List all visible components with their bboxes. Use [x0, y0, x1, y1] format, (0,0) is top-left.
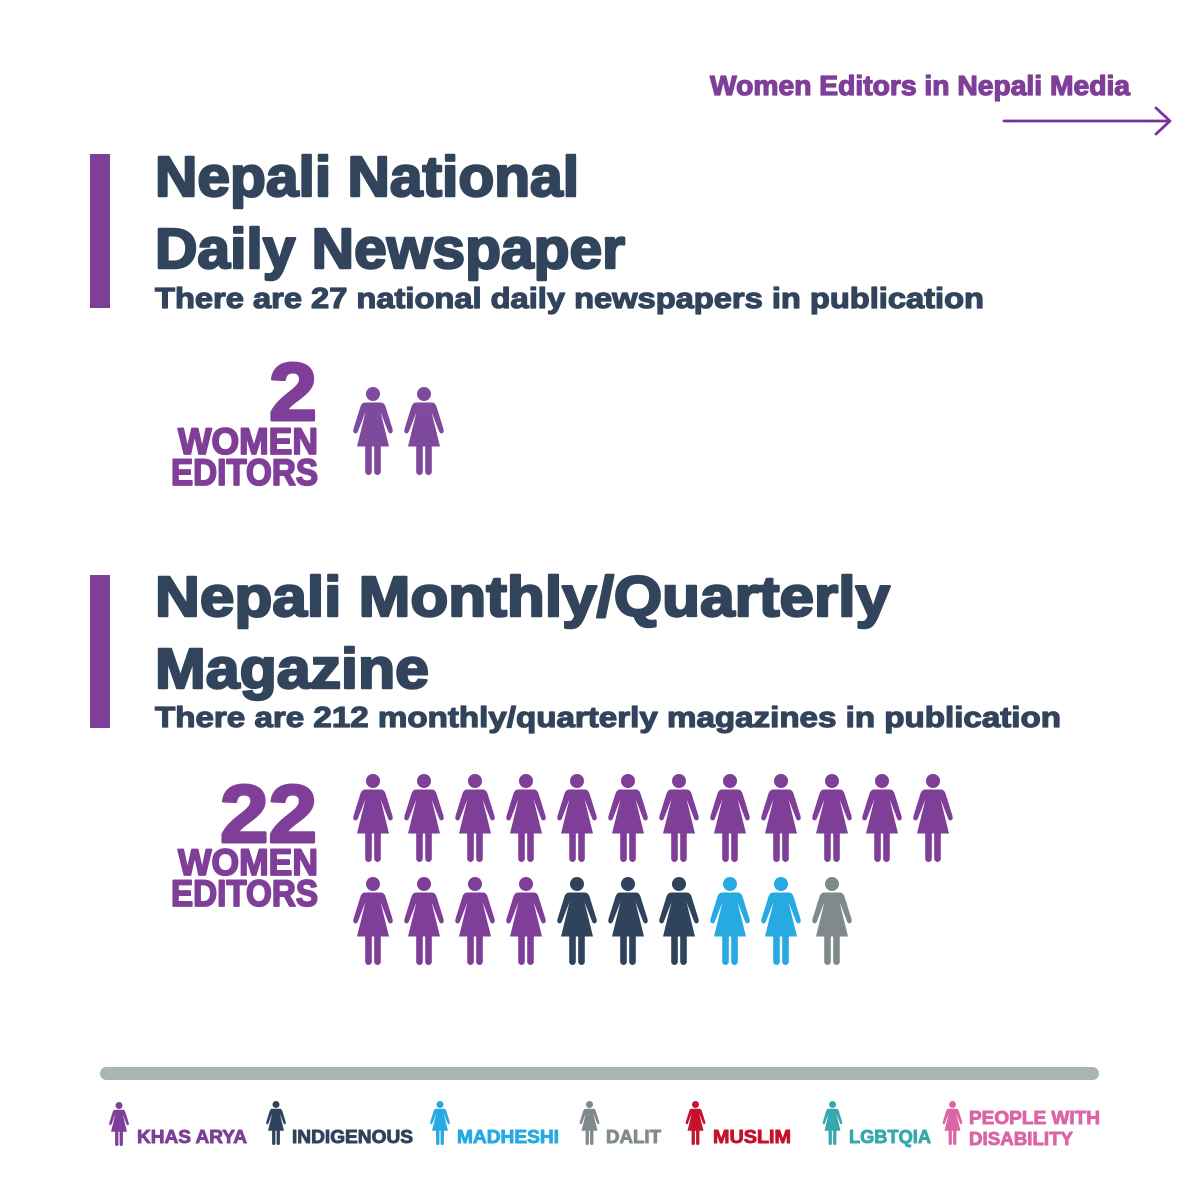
statistic: 2 women editors: EDITORS	[171, 452, 318, 493]
heading: Nepali Monthly/Quarterly	[155, 565, 890, 629]
heading	[155, 565, 890, 701]
pictogram: 22 women by group	[353, 774, 953, 965]
statistic: 2 women editors: WOMEN	[178, 421, 318, 462]
subheading: There are 27 national daily newspapers in publication	[155, 283, 984, 315]
accent bar	[90, 154, 110, 308]
legend item: Muslim	[686, 1101, 791, 1147]
legend item: LGBTQIA: LGBTQIA	[849, 1126, 931, 1147]
arrow	[1004, 108, 1170, 134]
legend item: Muslim: MUSLIM	[713, 1126, 791, 1147]
heading: Nepali National	[155, 145, 579, 209]
legend item: Khas Arya: KHAS ARYA	[137, 1126, 247, 1147]
panel: monthly/quarterly magazine	[90, 565, 1061, 965]
legend item: Khas Arya	[109, 1102, 247, 1147]
legend divider bar	[100, 1067, 1099, 1080]
accent bar	[90, 575, 110, 728]
legend item: LGBTQIA	[823, 1101, 931, 1147]
subheading: There are 212 monthly/quarterly magazines in publication	[155, 702, 1061, 734]
statistic: 2 women editors: 2	[269, 347, 317, 438]
legend item: Indigenous: INDIGENOUS	[292, 1126, 413, 1147]
heading: Daily Newspaper	[155, 217, 625, 281]
legend item: People with disability: PEOPLE WITH	[969, 1107, 1100, 1128]
panel: national daily newspaper	[90, 145, 984, 493]
legend item: Dalit: DALIT	[606, 1126, 662, 1147]
legend item: People with disability	[943, 1101, 1100, 1149]
legend item: People with disability: DISABILITY	[969, 1128, 1074, 1149]
statistic: 22 women editors: 22	[220, 769, 317, 860]
legend item: Dalit	[580, 1101, 662, 1147]
legend item: Madheshi	[430, 1101, 559, 1147]
legend item: Madheshi: MADHESHI	[457, 1126, 559, 1147]
statistic: 22 women editors	[171, 769, 318, 914]
header label: Women Editors in Nepali Media	[710, 70, 1131, 101]
statistic: 2 women editors	[171, 347, 318, 493]
pictogram: 2 women	[353, 387, 444, 475]
heading: Magazine	[155, 637, 429, 701]
legend item: Indigenous	[266, 1101, 413, 1147]
heading	[155, 145, 625, 281]
statistic: 22 women editors: EDITORS	[171, 873, 318, 914]
statistic: 22 women editors: WOMEN	[178, 842, 318, 883]
legend	[109, 1101, 1100, 1149]
